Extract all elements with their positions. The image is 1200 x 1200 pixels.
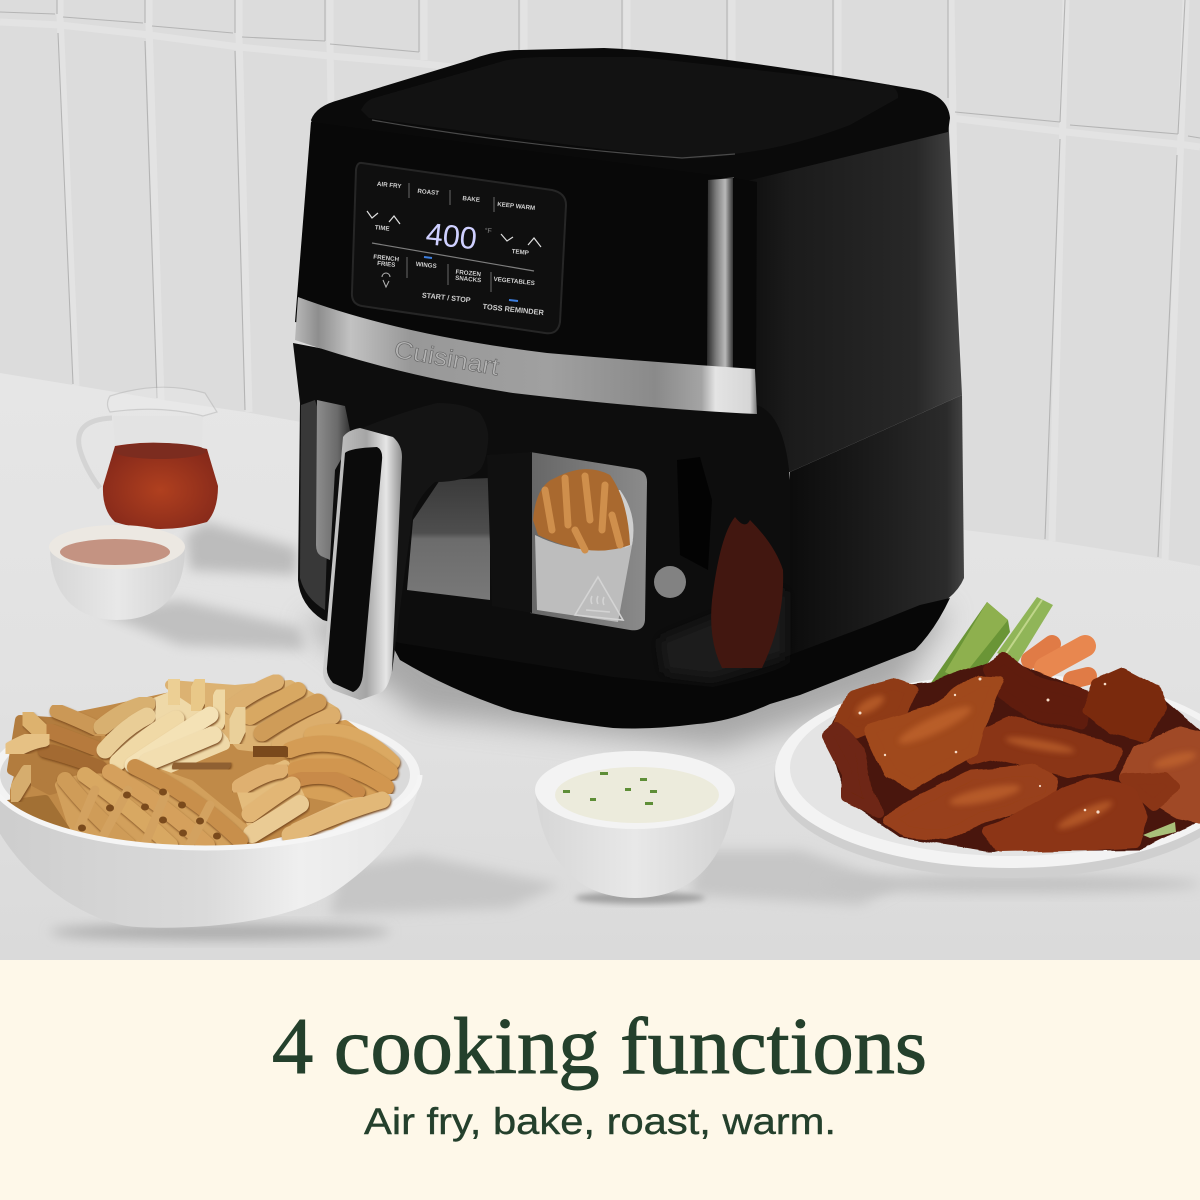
bowl of waffle fries [0,682,420,928]
panel label: mode buttons: WINGS [415,261,437,270]
chrome vertical strip [707,178,733,369]
background: tiled wall [0,0,1200,600]
fryer front upper face [295,122,757,382]
temperature display: 400 [424,216,479,256]
panel arrows and dividers [367,183,541,292]
panel label: mode buttons: FRIES [377,260,396,269]
panel label: mode buttons: FRENCH [373,254,400,263]
carrots [1030,644,1088,680]
plate of wings with celery and carrots [774,597,1200,878]
background: countertop [0,373,1200,960]
fryer feet and base [385,598,950,728]
panel label: mode buttons: FROZEN [455,269,482,278]
panel label: mode buttons [373,181,545,317]
celery piece on plate [1143,822,1176,838]
basket window left [316,400,352,560]
basket window centre [407,478,490,600]
counter shadows [50,522,1200,940]
control panel [352,163,566,333]
heading: 4 cooking functions [272,1003,927,1091]
chicken wings [826,657,1200,852]
panel label: mode buttons: ROAST [417,188,440,197]
fries cup in window [533,469,634,622]
basket window right [530,452,647,630]
stainless steel band with logo: Cuisinart [392,336,501,381]
panel label: mode buttons: START / STOP [421,290,471,305]
wing reflection [711,517,783,668]
lower grey sheen of basket [660,590,785,678]
reflective left side of basket [300,400,330,610]
basket knob [654,566,686,598]
panel label: mode buttons: VEGETABLES [493,276,535,287]
basket inner dark strip [487,452,532,613]
panel label: mode buttons: KEEP WARM [497,201,535,212]
warning triangle [575,577,623,620]
basket handle [323,403,488,700]
celery sticks [910,597,1053,713]
air fryer appliance [293,48,964,728]
waffle fries heap [8,682,392,850]
bottom caption band [0,960,1200,1200]
panel label: mode buttons: SNACKS [455,275,482,284]
stainless steel band with logo [295,297,757,414]
dish of pink sauce [49,525,185,620]
wing glaze highlights [853,678,1198,833]
fryer basket [293,343,790,687]
panel label: mode buttons: TEMP [511,248,529,257]
panel label: mode buttons: TIME [374,224,390,233]
subheading: Air fry, bake, roast, warm. [364,1101,836,1142]
dark reflection right of window [677,457,712,570]
panel label: mode buttons: BAKE [462,195,480,204]
bowl front rim [0,775,420,848]
panel label: mode buttons: AIR FRY [377,181,403,190]
panel label: mode buttons: °F [484,227,492,235]
pitcher of red sauce [79,387,218,538]
fryer side upper panel [733,112,962,475]
fryer side lower panel [790,395,964,668]
fryer top lid [311,48,950,184]
bowl front body [0,775,420,928]
panel label: mode buttons: TOSS REMINDER [482,302,545,317]
dish of ranch with chives [535,751,735,898]
